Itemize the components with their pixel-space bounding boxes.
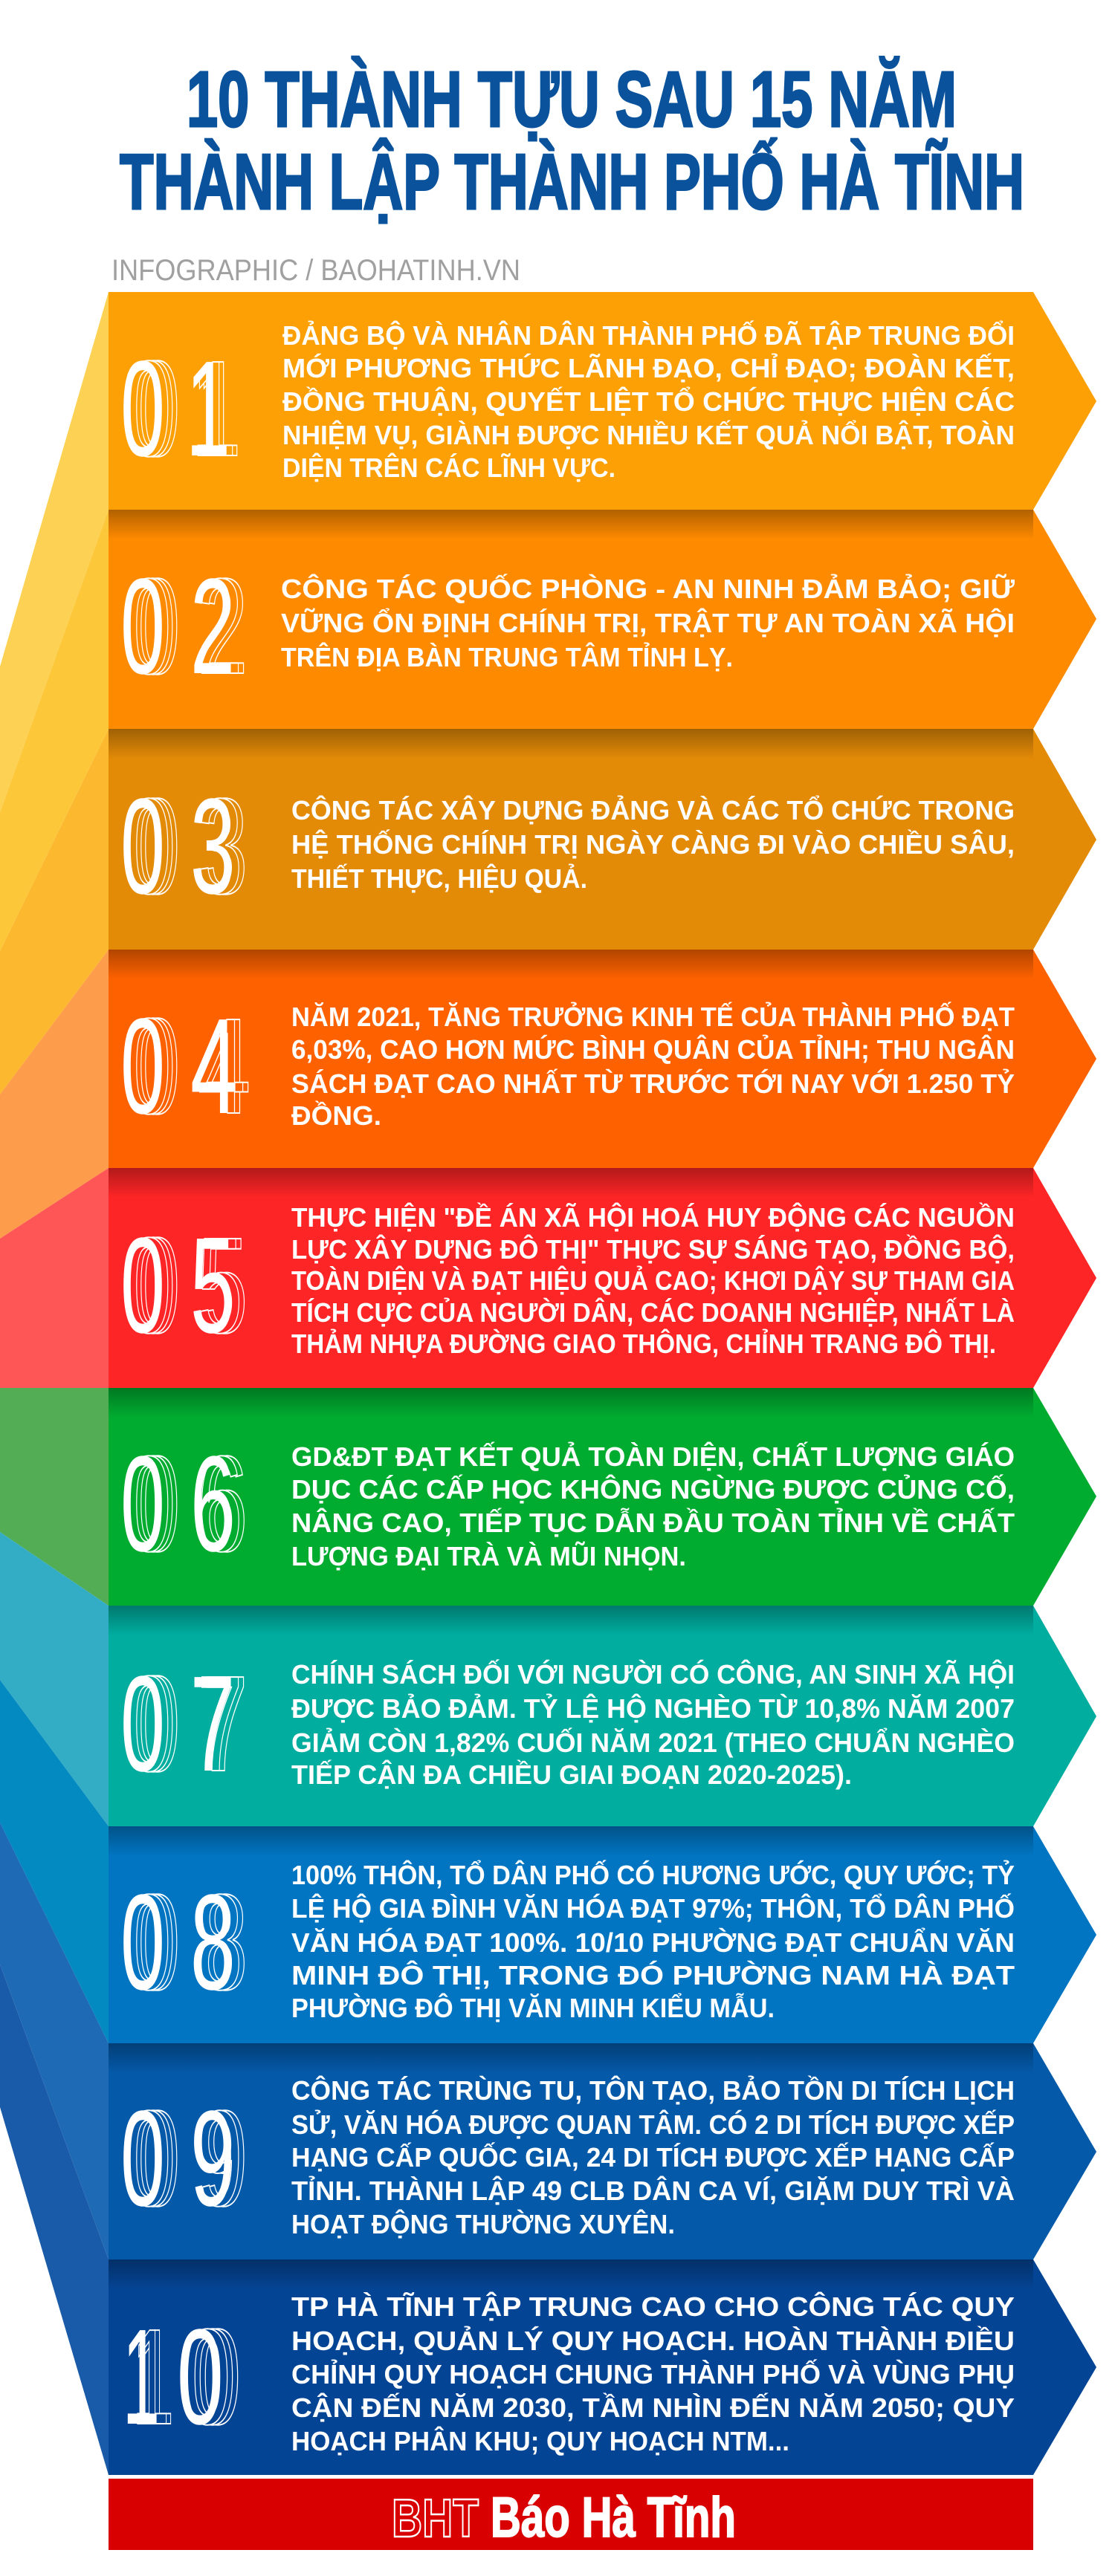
number 05: 5 <box>198 1209 242 1361</box>
text 10: HOẠCH, QUẢN LÝ QUY HOẠCH. HOÀN THÀNH ĐIỀU <box>291 2326 1015 2356</box>
text 03 <box>291 794 1015 894</box>
number 07: 7 <box>203 1647 248 1800</box>
subtitle: INFOGRAPHIC / BAOHATINH.VN <box>112 254 520 287</box>
number 06: 0 <box>135 1427 180 1580</box>
number 04: 0 <box>126 990 171 1142</box>
text 10: CẬN ĐẾN NĂM 2030, TẦM NHÌN ĐẾN NĂM 2050; QUY <box>291 2392 1015 2423</box>
number 09 <box>120 2082 248 2234</box>
number 08: 8 <box>190 1866 235 2018</box>
number 09: 0 <box>120 2082 165 2234</box>
number 03: 3 <box>190 770 235 922</box>
number 08: 8 <box>203 1866 248 2018</box>
text 01: ĐỒNG THUẬN, QUYẾT LIỆT TỔ CHỨC THỰC HIỆN CÁC <box>282 385 1015 417</box>
text 08: LỆ HỘ GIA ĐÌNH VĂN HÓA ĐẠT 97%; THÔN, TỔ DÂN PHỐ <box>291 1892 1015 1924</box>
number 10 <box>123 2300 241 2453</box>
number 02 <box>120 550 248 702</box>
number 06: 6 <box>198 1427 242 1580</box>
panel: 08 <box>109 1826 1096 2043</box>
text 07: GIẢM CÒN 1,82% CUỐI NĂM 2021 (THEO CHUẨN NGHÈO <box>291 1727 1015 1758</box>
number 08: 0 <box>126 1866 171 2018</box>
text 01: MỚI PHƯƠNG THỨC LÃNH ĐẠO, CHỈ ĐẠO; ĐOÀN KẾT, <box>282 352 1015 383</box>
number 01: 1 <box>192 332 236 484</box>
text 02 <box>281 573 1015 672</box>
number 04: 4 <box>203 990 251 1142</box>
number 08: 8 <box>198 1866 242 2018</box>
text 10 <box>291 2291 1015 2456</box>
text 07: ĐƯỢC BẢO ĐẢM. TỶ LỆ HỘ NGHÈO TỪ 10,8% NĂM 2007 <box>291 1693 1015 1724</box>
text 02: VỮNG ỔN ĐỊNH CHÍNH TRỊ, TRẬT TỰ AN TOÀN XÃ HỘI <box>281 606 1015 638</box>
number 09: 0 <box>131 2082 175 2234</box>
text 09: TỈNH. THÀNH LẬP 49 CLB DÂN CA VÍ, GIẶM DUY TRÌ VÀ <box>291 2175 1015 2206</box>
number 04: 4 <box>198 990 245 1142</box>
panel: 05 <box>109 1168 1096 1388</box>
panel: 06 <box>109 1388 1096 1606</box>
number 10: 0 <box>184 2300 230 2453</box>
text 08: VĂN HÓA ĐẠT 100%. 10/10 PHƯỜNG ĐẠT CHUẨN VĂN <box>291 1927 1015 1958</box>
number 07: 7 <box>198 1647 242 1800</box>
text 04: ĐỒNG. <box>291 1100 381 1131</box>
footer text: Báo Hà Tĩnh <box>491 2486 736 2549</box>
number 01: 0 <box>135 332 180 484</box>
number 05: 5 <box>203 1209 248 1361</box>
text 06: GD&ĐT ĐẠT KẾT QUẢ TOÀN DIỆN, CHẤT LƯỢNG GIÁO <box>291 1441 1015 1472</box>
text 01: ĐẢNG BỘ VÀ NHÂN DÂN THÀNH PHỐ ĐÃ TẬP TRUNG ĐỔI <box>282 319 1015 351</box>
number 10: 0 <box>177 2300 223 2453</box>
number 09: 9 <box>198 2082 242 2234</box>
number 06 <box>120 1427 248 1580</box>
number 10: 1 <box>123 2300 160 2453</box>
number 01 <box>120 332 241 484</box>
number 02: 0 <box>126 550 171 702</box>
number 05 <box>120 1209 248 1361</box>
number 08: 0 <box>120 1866 165 2018</box>
text 08: MINH ĐÔ THỊ, TRONG ĐÓ PHƯỜNG NAM HÀ ĐẠT <box>291 1959 1015 1991</box>
number 05: 0 <box>126 1209 171 1361</box>
text 10: CHỈNH QUY HOẠCH CHUNG THÀNH PHỐ VÀ VÙNG PHỤ <box>291 2358 1015 2390</box>
text 03: CÔNG TÁC XÂY DỰNG ĐẢNG VÀ CÁC TỔ CHỨC TRONG <box>291 794 1015 825</box>
text 09: CÔNG TÁC TRÙNG TU, TÔN TẠO, BẢO TỒN DI TÍCH LỊCH <box>291 2074 1015 2106</box>
number 10: 0 <box>195 2300 241 2453</box>
number 01: 0 <box>131 332 175 484</box>
number 02: 2 <box>203 550 248 702</box>
text 09: HOẠT ĐỘNG THƯỜNG XUYÊN. <box>291 2208 675 2239</box>
number 07: 7 <box>190 1647 235 1800</box>
text 07: TIẾP CẬN ĐA CHIỀU GIAI ĐOẠN 2020-2025). <box>291 1759 852 1790</box>
number 03 <box>120 770 248 922</box>
number 08: 0 <box>135 1866 180 2018</box>
panel: 02 <box>109 510 1096 729</box>
number 01: 0 <box>126 332 171 484</box>
number 07 <box>120 1647 248 1800</box>
number 09: 0 <box>126 2082 171 2234</box>
panel: 10 <box>109 2259 1096 2475</box>
text 04: 6,03%, CAO HƠN MỨC BÌNH QUÂN CỦA TỈNH; THU NGÂN <box>291 1034 1015 1065</box>
number 01: 1 <box>196 332 241 484</box>
panel: 04 <box>109 950 1096 1168</box>
number 04: 0 <box>120 990 165 1142</box>
text 05: THỰC HIỆN "ĐỀ ÁN XÃ HỘI HOÁ HUY ĐỘNG CÁC NGUỒN <box>291 1201 1015 1233</box>
number 10: 0 <box>190 2300 236 2453</box>
number 03: 3 <box>198 770 242 922</box>
text 08 <box>291 1858 1015 2023</box>
text 06 <box>291 1441 1015 1571</box>
text 02: TRÊN ĐỊA BÀN TRUNG TÂM TỈNH LỴ. <box>281 641 733 672</box>
number 02: 2 <box>198 550 242 702</box>
text 07 <box>291 1658 1015 1790</box>
text 03: HỆ THỐNG CHÍNH TRỊ NGÀY CÀNG ĐI VÀO CHIỀU SÂU, <box>291 828 1015 860</box>
text 09: SỬ, VĂN HÓA ĐƯỢC QUAN TÂM. CÓ 2 DI TÍCH ĐƯỢC XẾP <box>291 2109 1015 2140</box>
number 04 <box>120 990 251 1142</box>
number 06: 0 <box>126 1427 171 1580</box>
number 05: 0 <box>120 1209 165 1361</box>
icon: BHT logo: BHT <box>392 2489 479 2549</box>
number 03: 0 <box>131 770 175 922</box>
number 02: 0 <box>120 550 165 702</box>
number 04: 0 <box>131 990 175 1142</box>
number 03: 3 <box>203 770 248 922</box>
number 09: 0 <box>135 2082 180 2234</box>
text 06: NÂNG CAO, TIẾP TỤC DẪN ĐẦU TOÀN TỈNH VỀ CHẤT <box>291 1507 1015 1538</box>
text 05: TÍCH CỰC CỦA NGƯỜI DÂN, CÁC DOANH NGHIỆP, NHẤT LÀ <box>291 1297 1015 1328</box>
title <box>120 56 1024 226</box>
number 05: 0 <box>135 1209 180 1361</box>
text 01: DIỆN TRÊN CÁC LĨNH VỰC. <box>282 452 615 483</box>
text 09 <box>291 2074 1015 2239</box>
number 07: 0 <box>131 1647 175 1800</box>
text 08: 100% THÔN, TỔ DÂN PHỐ CÓ HƯƠNG ƯỚC, QUY ƯỚC; TỶ <box>291 1858 1015 1890</box>
text 07: CHÍNH SÁCH ĐỐI VỚI NGƯỜI CÓ CÔNG, AN SINH XÃ HỘI <box>291 1658 1015 1690</box>
number 08 <box>120 1866 248 2018</box>
panel: 03 <box>109 729 1096 950</box>
panel: 09 <box>109 2043 1096 2259</box>
text 04: SÁCH ĐẠT CAO NHẤT TỪ TRƯỚC TỚI NAY VỚI 1.250 TỶ <box>291 1068 1015 1099</box>
text 08: PHƯỜNG ĐÔ THỊ VĂN MINH KIỂU MẪU. <box>291 1992 775 2023</box>
number 08: 0 <box>131 1866 175 2018</box>
text 10: HOẠCH PHÂN KHU; QUY HOẠCH NTM... <box>291 2425 789 2456</box>
text 05: LỰC XÂY DỰNG ĐÔ THỊ" THỰC SỰ SÁNG TẠO, ĐỒNG BỘ, <box>291 1233 1015 1265</box>
text 01: NHIỆM VỤ, GIÀNH ĐƯỢC NHIỀU KẾT QUẢ NỔI BẬT, TOÀN <box>282 418 1015 450</box>
number 07: 0 <box>126 1647 171 1800</box>
number 05: 0 <box>131 1209 175 1361</box>
number 02: 2 <box>190 550 235 702</box>
text 05: TOÀN DIỆN VÀ ĐẠT HIỆU QUẢ CAO; KHƠI DẬY SỰ THAM GIA <box>291 1265 1015 1296</box>
text 04: NĂM 2021, TĂNG TRƯỞNG KINH TẾ CỦA THÀNH PHỐ ĐẠT <box>291 1001 1015 1032</box>
number 04: 0 <box>135 990 180 1142</box>
number 09: 9 <box>203 2082 248 2234</box>
number 09: 9 <box>190 2082 235 2234</box>
panel: 01 <box>109 292 1096 510</box>
number 04: 4 <box>190 990 238 1142</box>
number 10: 1 <box>132 2300 169 2453</box>
text 03: THIẾT THỰC, HIỆU QUẢ. <box>291 863 587 894</box>
number 02: 0 <box>135 550 180 702</box>
number 06: 0 <box>120 1427 165 1580</box>
number 01: 0 <box>120 332 165 484</box>
text 04 <box>291 1001 1015 1131</box>
number 02: 0 <box>131 550 175 702</box>
panel: 07 <box>109 1606 1096 1826</box>
text 09: HẠNG CẤP QUỐC GIA, 24 DI TÍCH ĐƯỢC XẾP HẠNG CẤP <box>291 2141 1015 2173</box>
number 03: 0 <box>120 770 165 922</box>
number 07: 0 <box>135 1647 180 1800</box>
number 03: 0 <box>126 770 171 922</box>
footer: Báo Hà Tĩnh <box>109 2479 1033 2550</box>
left ribbon folds <box>0 292 109 2475</box>
number 07: 0 <box>120 1647 165 1800</box>
text 05: THẢM NHỰA ĐƯỜNG GIAO THÔNG, CHỈNH TRANG ĐÔ THỊ. <box>291 1328 996 1359</box>
number 06: 6 <box>203 1427 248 1580</box>
number 06: 6 <box>190 1427 235 1580</box>
text 01 <box>282 319 1015 483</box>
number 01: 1 <box>186 332 230 484</box>
number 10: 1 <box>137 2300 174 2453</box>
text 02: CÔNG TÁC QUỐC PHÒNG - AN NINH ĐẢM BẢO; GIỮ <box>281 573 1015 604</box>
number 05: 5 <box>190 1209 235 1361</box>
number 06: 0 <box>131 1427 175 1580</box>
text 05 <box>291 1201 1015 1359</box>
number 03: 0 <box>135 770 180 922</box>
text 06: LƯỢNG ĐẠI TRÀ VÀ MŨI NHỌN. <box>291 1540 686 1571</box>
text 10: TP HÀ TĨNH TẬP TRUNG CAO CHO CÔNG TÁC QUY <box>291 2291 1015 2322</box>
text 06: DỤC CÁC CẤP HỌC KHÔNG NGỪNG ĐƯỢC CỦNG CỐ, <box>291 1473 1015 1505</box>
